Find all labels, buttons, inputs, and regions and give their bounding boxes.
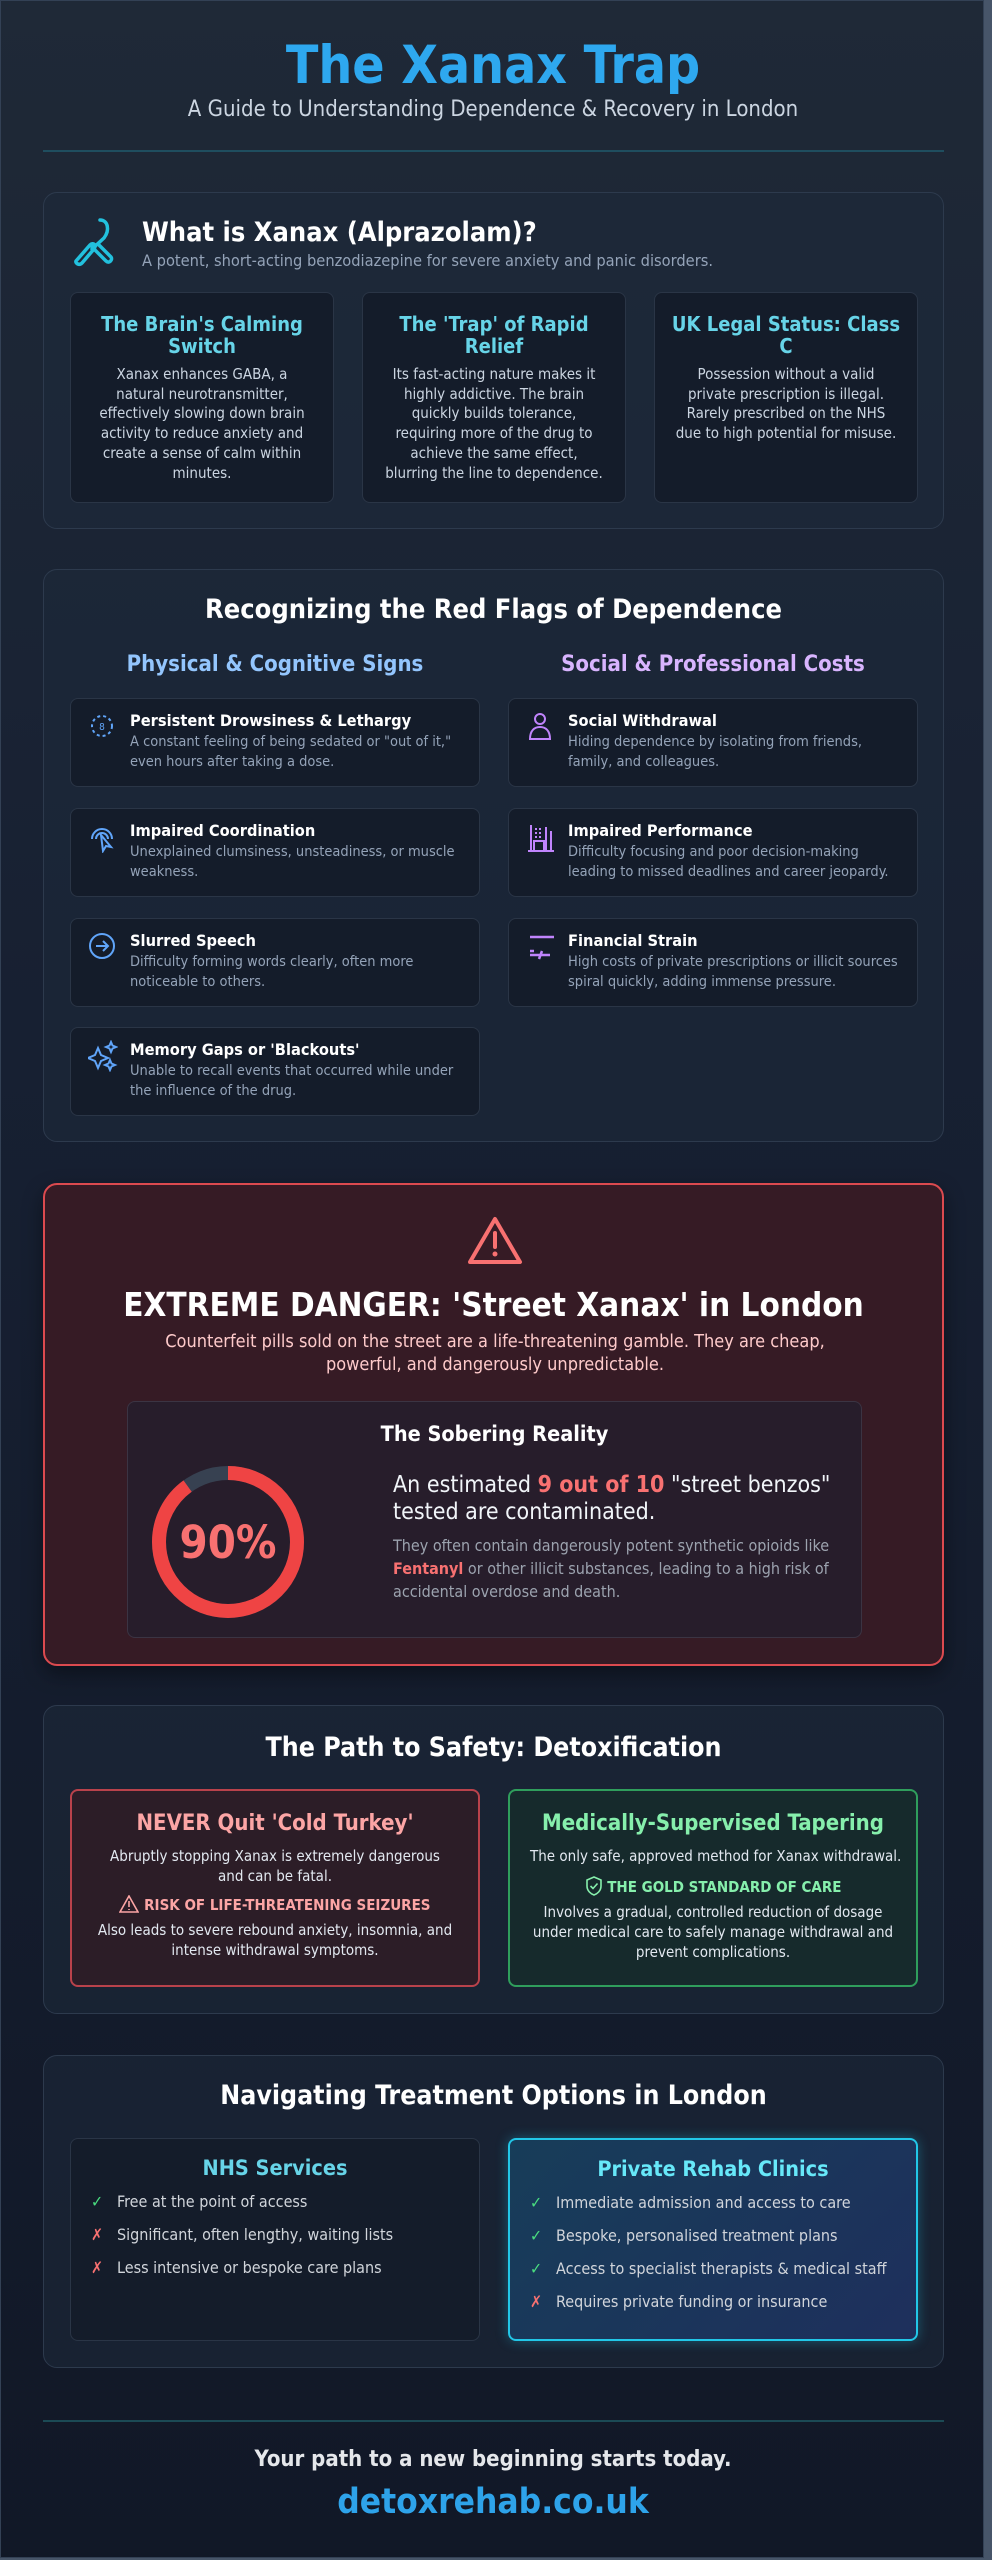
card: coordination — [70, 808, 480, 897]
panel: detox — [43, 1705, 944, 2014]
subtitle: A Guide to Understanding Dependence & Recovery in London — [188, 97, 798, 122]
card: cold turkey: RISK OF LIFE-THREATENING SEIZURES — [144, 1896, 431, 1914]
card: NHS: ✗ — [91, 2225, 103, 2244]
stat text — [392, 1472, 830, 1601]
card: cold turkey: NEVER Quit 'Cold Turkey' — [136, 1811, 414, 1836]
card: tapering: Medically-Supervised Tapering — [542, 1811, 884, 1836]
card: performance — [508, 808, 918, 897]
panel: red flags — [43, 569, 944, 1142]
card: private: ✗ — [530, 2292, 542, 2311]
card: private: ✓ — [530, 2259, 542, 2278]
card: coordination: Impaired Coordination — [130, 821, 315, 840]
card: calming switch — [70, 292, 334, 503]
card: tapering: The only safe, approved method for Xanax withdrawal. — [530, 1847, 901, 1865]
card: slurred speech: Slurred Speech — [130, 931, 256, 950]
footer tagline: Your path to a new beginning starts today. — [255, 2447, 731, 2472]
card: NHS: Free at the point of access — [117, 2192, 307, 2211]
card: private: Access to specialist therapists & medical staff — [556, 2259, 886, 2278]
card: NHS: NHS Services — [203, 2156, 347, 2181]
card: memory gaps — [70, 1027, 480, 1116]
footer url: detoxrehab.co.uk — [337, 2482, 649, 2522]
icon: pill/stethoscope — [74, 218, 114, 266]
column heading: social: Social & Professional Costs — [561, 652, 865, 677]
donut chart: 90% — [180, 1516, 276, 1569]
card: private — [508, 2138, 918, 2341]
card: social withdrawal — [508, 698, 918, 787]
card: social withdrawal: Social Withdrawal — [568, 711, 717, 730]
card: tapering: THE GOLD STANDARD OF CARE — [607, 1878, 841, 1896]
card: NHS: Significant, often lengthy, waiting lists — [117, 2225, 393, 2244]
card: financial — [508, 918, 918, 1007]
card: calming switch: The Brain's Calming Switch — [101, 312, 303, 358]
card: social withdrawal: Hiding dependence by isolating from friends, family, and colleagues. — [568, 734, 862, 770]
heading: Recognizing the Red Flags of Dependence — [205, 594, 782, 625]
heading: The Path to Safety: Detoxification — [266, 1732, 721, 1763]
heading: EXTREME DANGER: 'Street Xanax' in London — [123, 1285, 864, 1324]
heading: What is Xanax (Alprazolam)? — [142, 217, 537, 248]
card: slurred speech — [70, 918, 480, 1007]
donut chart — [152, 1466, 304, 1618]
card: calming switch: Xanax enhances GABA, a natural neurotransmitter, effectively slowing down brain activity to reduce anxiety and create a sense of calm within minutes. — [99, 365, 305, 482]
card: NHS — [70, 2138, 480, 2341]
card: slurred speech: Difficulty forming words clearly, often more noticeable to others. — [130, 954, 413, 990]
card: trap: Its fast-acting nature makes it highly addictive. The brain quickly builds tolerance, requiring more of the drug to achieve the same effect, blurring the line to dependence. — [385, 365, 603, 482]
text: Counterfeit pills sold on the street are a life-threatening gamble. They are cheap, powerful, and dangerously unpredictable. — [165, 1331, 825, 1375]
card: cold turkey: Also leads to severe rebound anxiety, insomnia, and intense withdrawal symptoms. — [98, 1921, 452, 1959]
card: legal — [654, 292, 918, 503]
stat heading: The Sobering Reality — [381, 1422, 608, 1447]
card: financial: Financial Strain — [568, 931, 698, 950]
card: legal: Possession without a valid private prescription is illegal. Rarely prescribed on the NHS due to high potential for misuse. — [676, 365, 896, 442]
card: cold turkey: Abruptly stopping Xanax is extremely dangerous and can be fatal. — [110, 1847, 440, 1885]
card: tapering — [508, 1789, 918, 1987]
card: private: Requires private funding or insurance — [556, 2292, 827, 2311]
card: NHS: ✗ — [91, 2258, 103, 2277]
card: private: Immediate admission and access to care — [556, 2193, 851, 2212]
heading: Navigating Treatment Options in London — [220, 2080, 767, 2111]
card: legal: UK Legal Status: Class C — [672, 312, 900, 358]
column heading: physical: Physical & Cognitive Signs — [127, 652, 423, 677]
title: The Xanax Trap — [286, 35, 700, 96]
card: memory gaps: Memory Gaps or 'Blackouts' — [130, 1040, 360, 1059]
card: NHS: Less intensive or bespoke care plans — [117, 2258, 382, 2277]
card: financial: High costs of private prescriptions or illicit sources spiral quickly, adding immense pressure. — [568, 954, 898, 990]
card: private: ✓ — [530, 2193, 542, 2212]
stat box — [127, 1401, 862, 1638]
panel: extreme danger — [43, 1183, 944, 1666]
card: private: ✓ — [530, 2226, 542, 2245]
card: private: Bespoke, personalised treatment plans — [556, 2226, 838, 2245]
panel: treatment options — [43, 2055, 944, 2368]
card: private: Private Rehab Clinics — [597, 2157, 829, 2182]
card: cold turkey — [70, 1789, 480, 1987]
stat text: They often contain dangerously potent synthetic opioids like Fentanyl or other illicit substances, leading to a high risk of accidental overdose and death. — [393, 1536, 829, 1601]
card: drowsiness: 8 — [99, 722, 105, 733]
card: drowsiness: A constant feeling of being sedated or "out of it," even hours after taking a dose. — [130, 734, 451, 770]
card: performance: Impaired Performance — [568, 821, 753, 840]
card: NHS: ✓ — [91, 2192, 103, 2211]
card: tapering: Involves a gradual, controlled reduction of dosage under medical care to safely manage withdrawal and prevent complications. — [533, 1903, 893, 1961]
card: drowsiness: Persistent Drowsiness & Lethargy — [130, 711, 411, 730]
icon: warning — [468, 1216, 522, 1264]
card: memory gaps: Unable to recall events that occurred while under the influence of the drug. — [130, 1063, 453, 1099]
stat text: An estimated 9 out of 10 "street benzos" tested are contaminated. — [393, 1472, 830, 1525]
card: trap: The 'Trap' of Rapid Relief — [399, 312, 589, 358]
subheading: A potent, short-acting benzodiazepine for severe anxiety and panic disorders. — [142, 251, 713, 270]
card: performance: Difficulty focusing and poor decision-making leading to missed deadlines and career jeopardy. — [568, 844, 888, 880]
card: coordination: Unexplained clumsiness, unsteadiness, or muscle weakness. — [130, 844, 455, 880]
card: drowsiness — [70, 698, 480, 787]
card: trap — [362, 292, 626, 503]
panel: what is xanax — [43, 192, 944, 529]
